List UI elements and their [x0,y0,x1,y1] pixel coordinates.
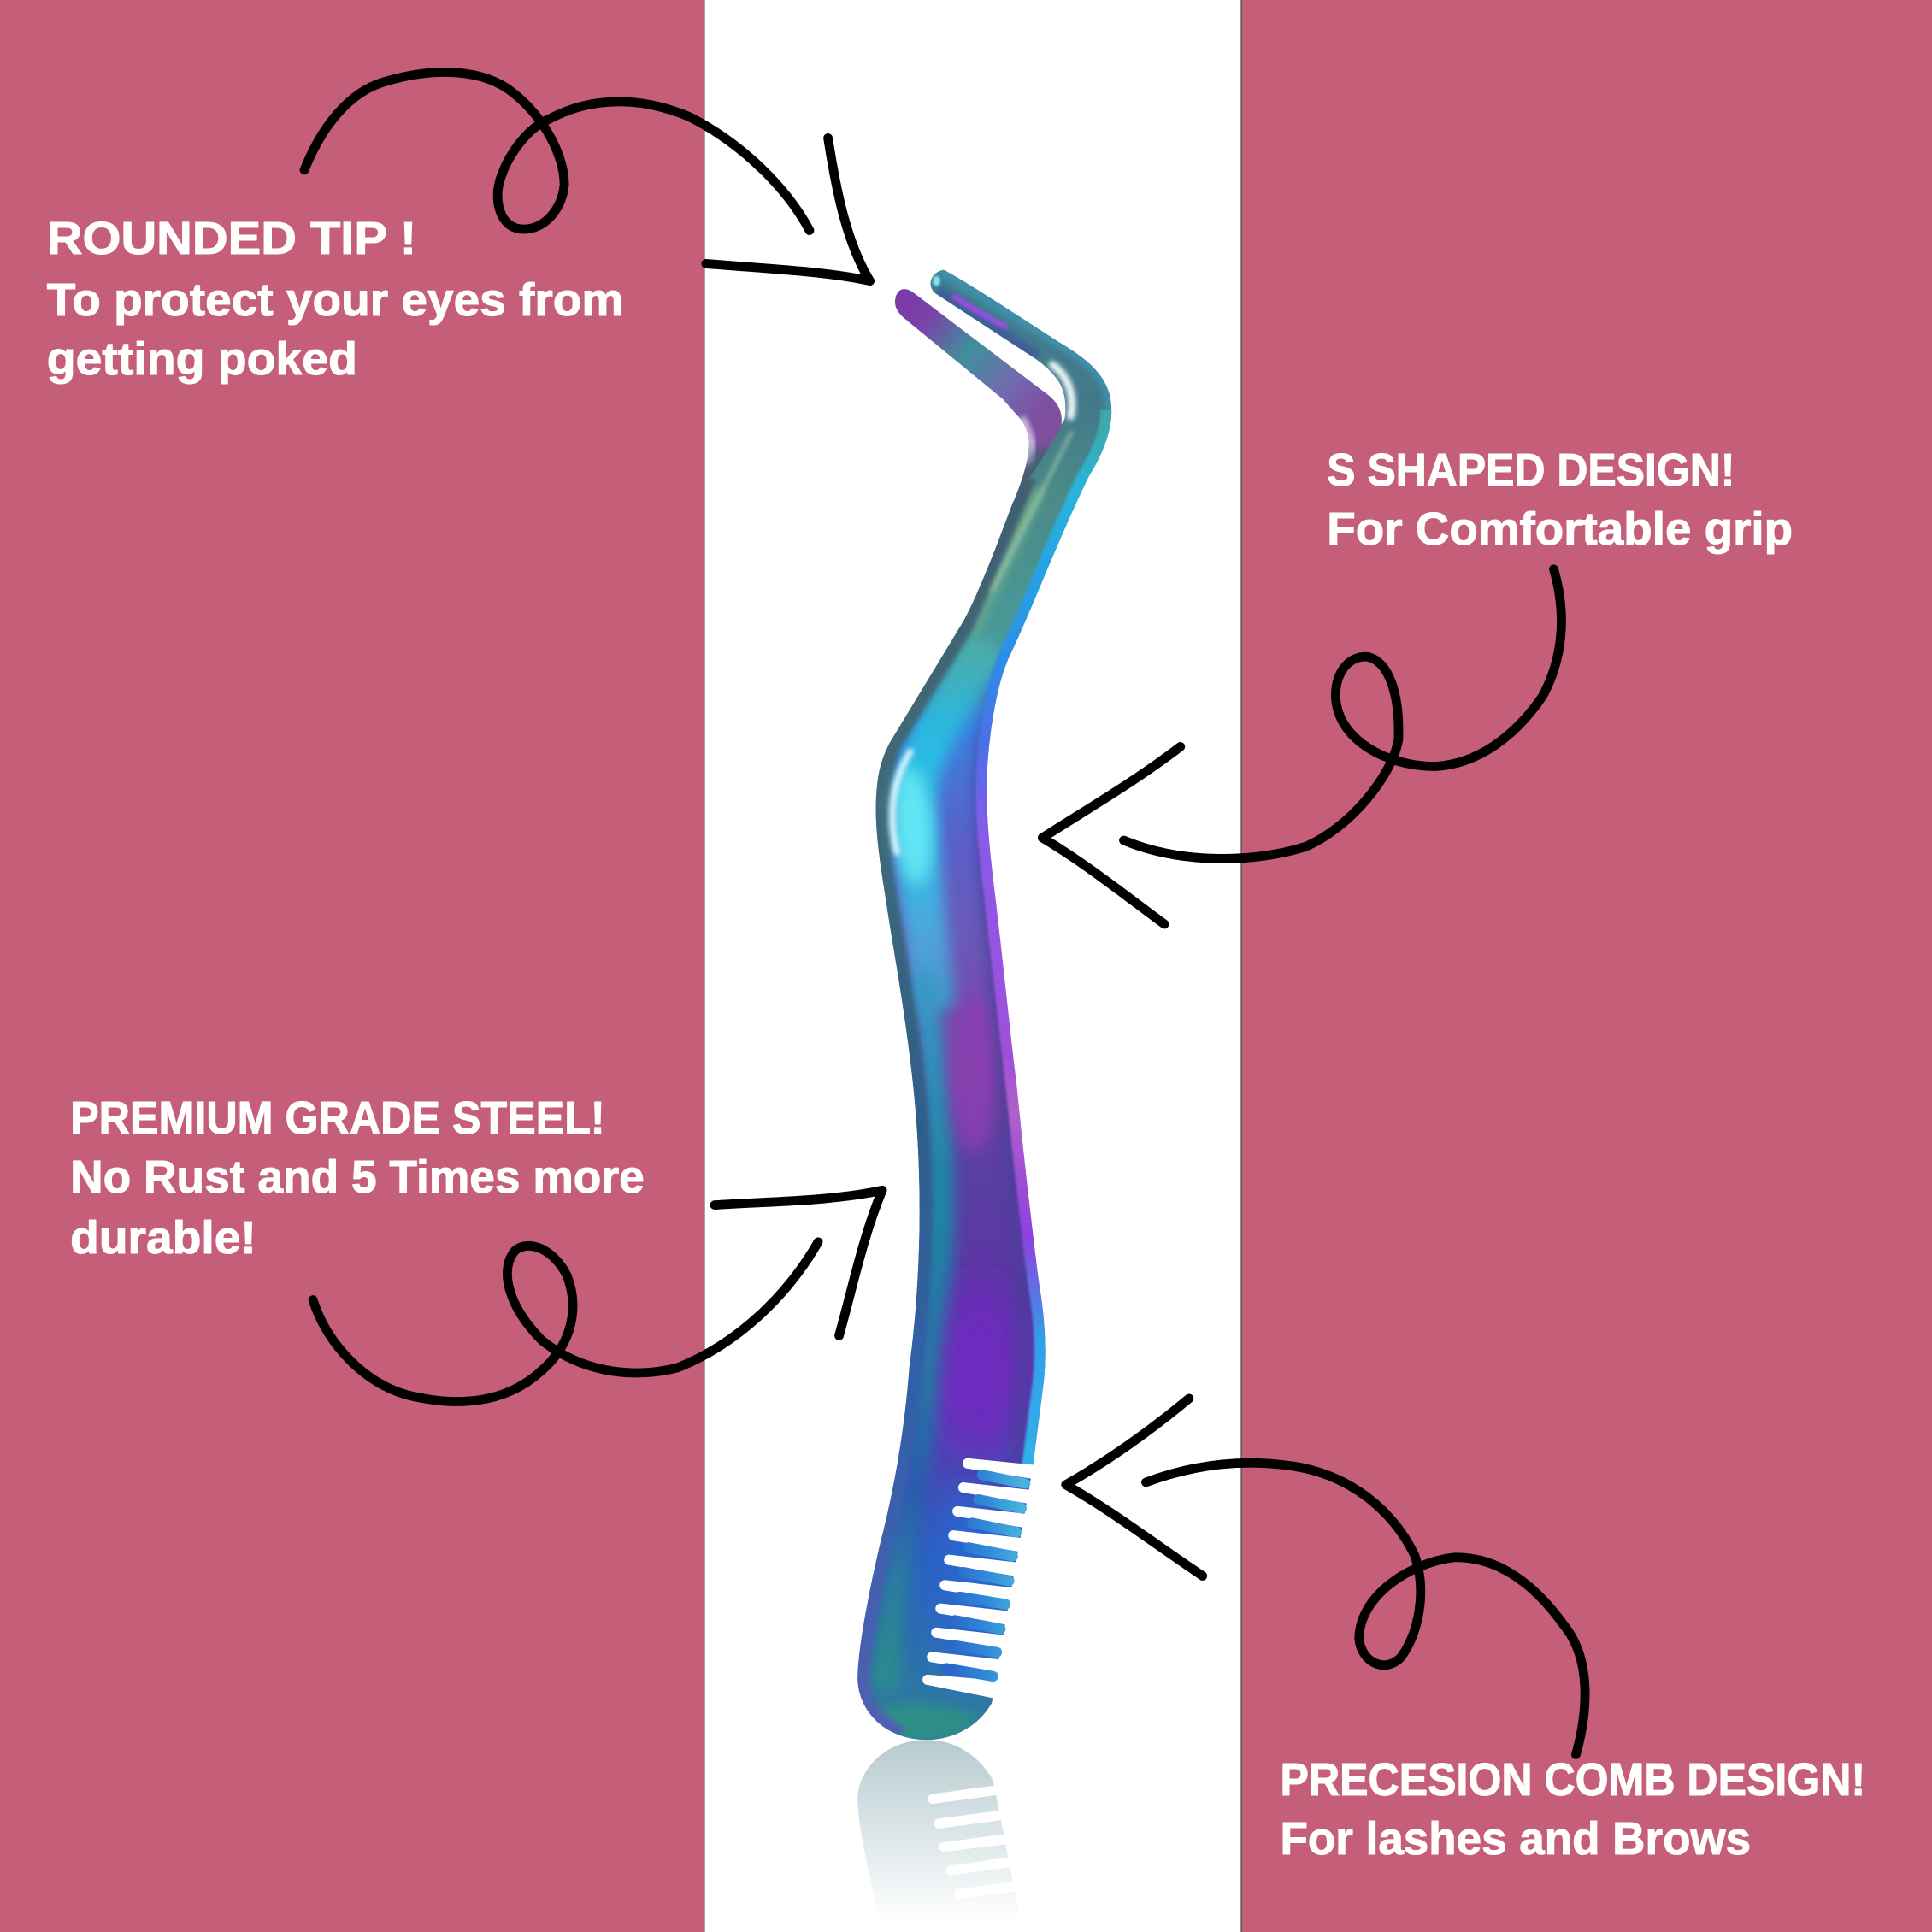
arrow: precision comb design [1066,1399,1585,1754]
text block: premium grade steel: PREMIUM GRADE STEEL! [70,1093,605,1144]
text block: rounded tip [47,214,623,385]
text block: S shaped design [1327,445,1793,555]
arrow: rounded tip [304,72,870,281]
text block: precision comb design [1281,1755,1865,1864]
text block: premium grade steel: No Rust and 5 Times more [70,1152,645,1203]
text block: precision comb design: For lashes and Brows [1281,1814,1751,1864]
tweezers illustration [857,270,1111,1741]
panel: left pink column [0,0,704,1932]
text block: S shaped design: For Comfortable grip [1327,504,1793,555]
text block: rounded tip: ROUNDED TIP ! [47,214,416,264]
comb teeth [946,1475,1025,1676]
arrow: premium grade steel [313,1190,882,1401]
text block: precision comb design: PRECESION COMB DESIGN! [1281,1755,1865,1805]
text block: S shaped design: S SHAPED DESIGN! [1327,445,1735,496]
right divider line [1240,0,1242,1932]
front arm of tweezers [895,289,1062,503]
panel: right pink column [1240,0,1932,1932]
tweezers reflection [857,1740,1022,1932]
text block: rounded tip: getting poked [47,334,357,385]
arrow: S shaped design [1042,569,1561,924]
comb teeth gaps [922,1458,1087,1701]
tweezers main body and back arm [857,270,1111,1741]
text block: rounded tip: To protect your eyes from [47,275,623,326]
text block: premium grade steel [70,1093,645,1263]
text block: premium grade steel: durable! [70,1213,256,1263]
